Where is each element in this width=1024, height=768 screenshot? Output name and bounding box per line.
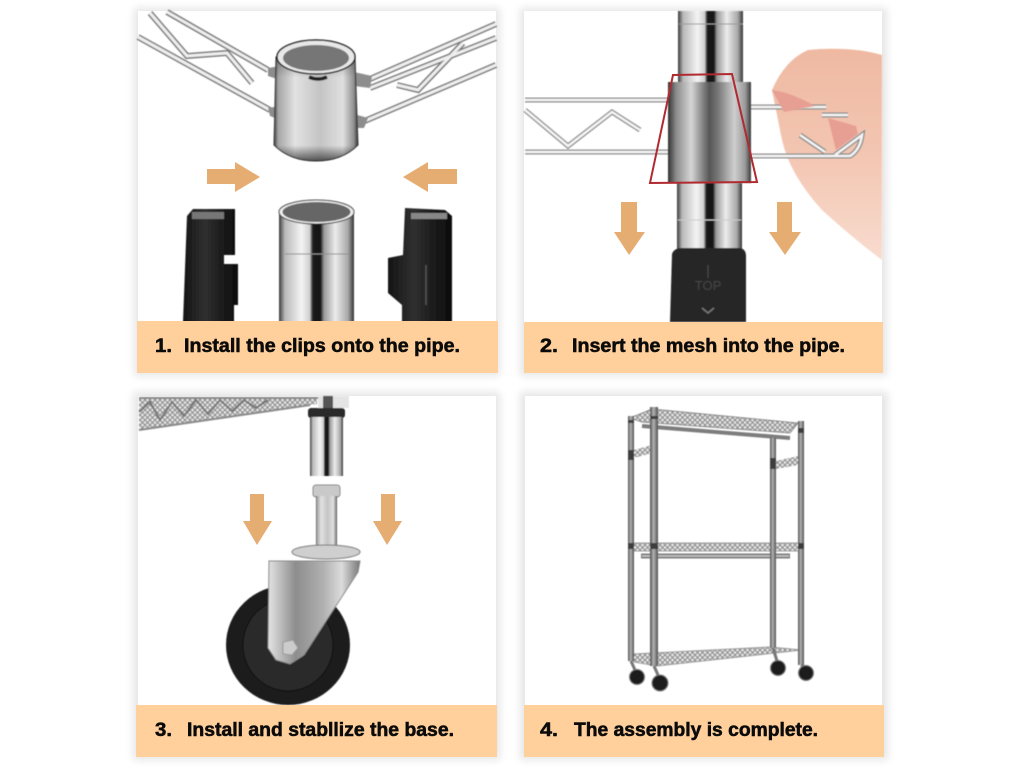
arrow: left-pointing: [403, 162, 457, 192]
caption: step 4: The assembly is complete.: [574, 720, 818, 741]
icon: leg tube: [308, 396, 349, 476]
post clips: [628, 416, 804, 549]
arrow: down right: [373, 494, 402, 545]
highlight: red trapezoid: [650, 74, 757, 183]
icon: hand: [772, 49, 882, 260]
caption: step 3: Install and stabllize the base.: [187, 720, 454, 741]
icon: caster wheel: [226, 485, 360, 705]
icon: wire shelf corner: [139, 398, 320, 430]
caption: step 2: Insert the mesh into the pipe.: [572, 336, 845, 357]
panel: step 1, install the clips: [134, 8, 500, 376]
panel: step 4, assembly complete: [520, 392, 888, 760]
icon: assembled rack: [628, 407, 814, 691]
arrow: down left: [614, 202, 645, 255]
icon: chrome pole and black sleeve: [668, 11, 751, 322]
caption: step 2: 2.: [540, 336, 558, 357]
panel: step 2, insert the mesh: [520, 8, 887, 376]
side hooks: [634, 445, 652, 458]
icon: wire shelf and collar: [138, 12, 496, 161]
icon: chrome pipe: [279, 200, 354, 322]
casters: [630, 660, 814, 691]
hanging rods: [642, 426, 790, 438]
icon: wire shelf: [525, 100, 862, 156]
front posts: [650, 407, 658, 666]
caption: step 4: 4.: [540, 720, 558, 741]
shelves: [630, 409, 798, 433]
icon: left black clip: [183, 209, 238, 322]
caption: step 4: [524, 705, 884, 757]
caption: step 1: [137, 321, 498, 373]
arrow: down right: [769, 202, 801, 255]
caption: step 1: 1.: [155, 336, 172, 357]
caption: step 3: [136, 705, 497, 757]
caster stems: [631, 648, 805, 675]
caption: step 1: Install the clips onto the pipe.: [184, 336, 460, 357]
icon: right black clip: [388, 208, 452, 322]
back posts: [770, 438, 776, 648]
icon: hand fingers: [772, 90, 858, 150]
arrow: right-pointing: [207, 162, 260, 192]
arrow: down left: [243, 494, 272, 545]
icon: chrome pole and black sleeve: TOP: [695, 278, 721, 293]
panel: step 3, install the base: [133, 392, 500, 760]
caption: step 2: [524, 322, 883, 373]
caption: step 3: 3.: [155, 720, 172, 741]
